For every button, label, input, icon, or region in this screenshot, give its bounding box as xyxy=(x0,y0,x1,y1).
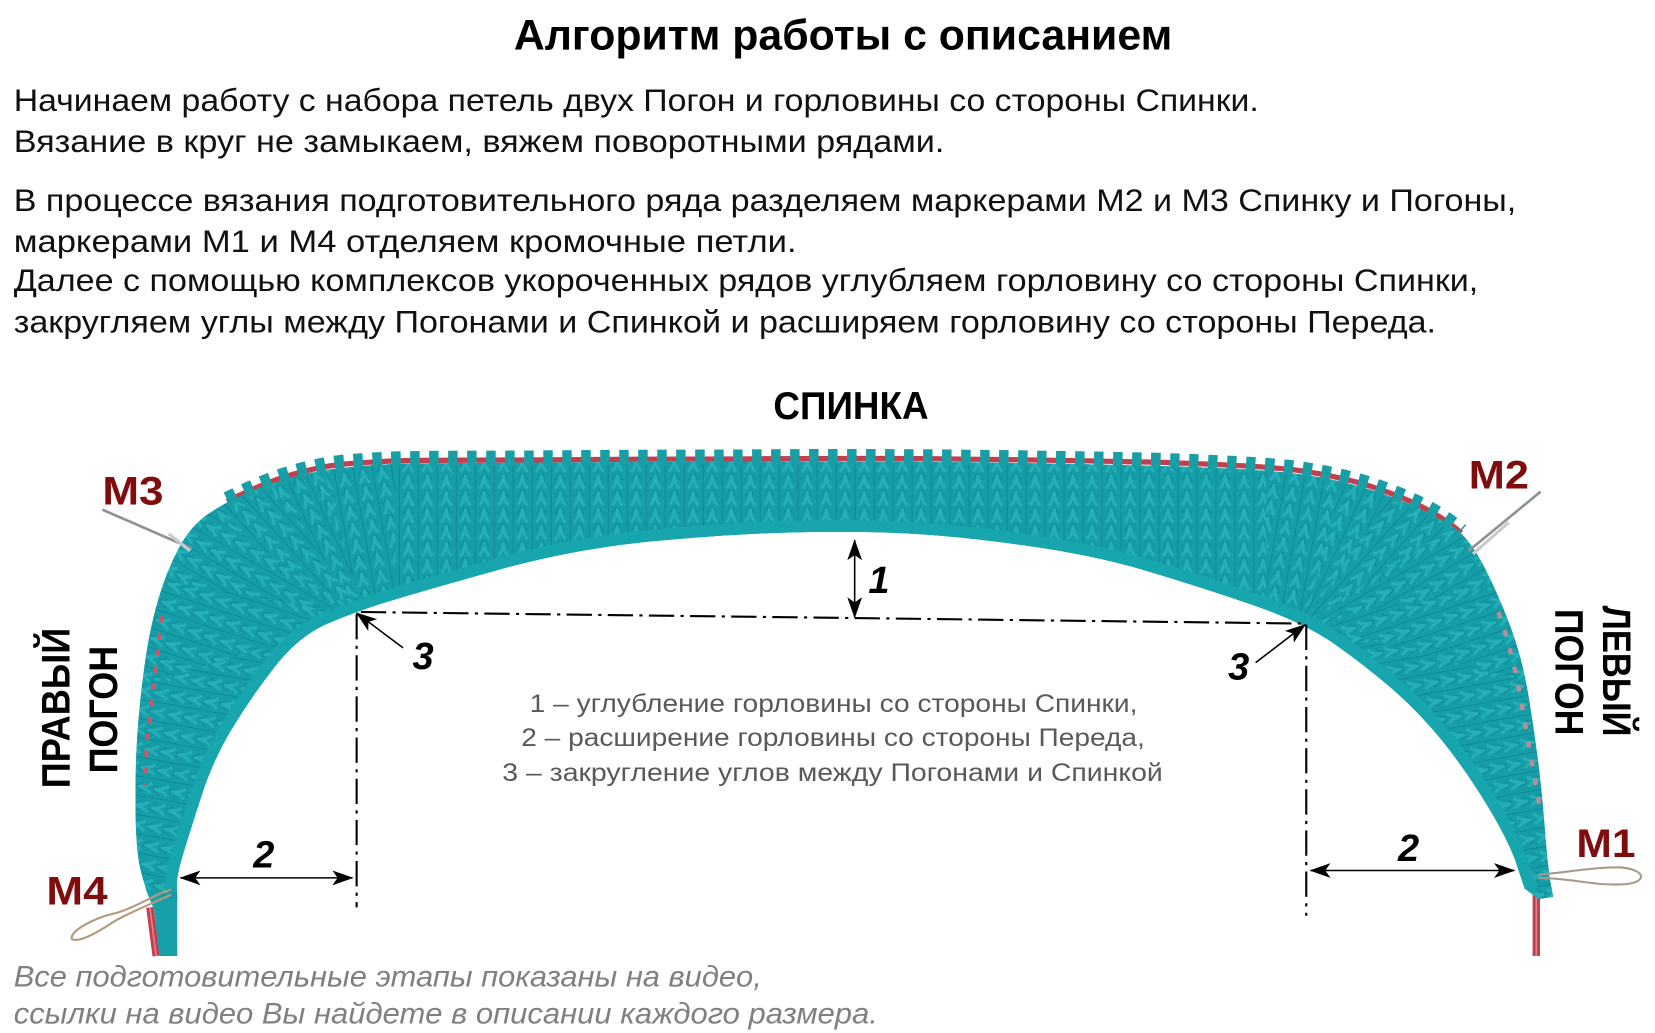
legend xyxy=(502,690,1163,787)
marker labels: М3 xyxy=(102,469,164,513)
edge holes on right shoulder of the wearer xyxy=(146,616,161,786)
footnote: Все подготовительные этапы показаны на видео, xyxy=(14,961,762,994)
text block: process description: маркерами М1 и М4 отделяем кромочные петли. xyxy=(14,223,797,259)
cable ends xyxy=(150,892,1536,956)
marker labels: М4 xyxy=(46,869,108,913)
arrow: right widening xyxy=(1310,870,1514,872)
text block: process description: закругляем углы между Погонами и Спинкой и расширяем горловину со стороны Переда. xyxy=(14,303,1436,339)
text block: process description: Далее с помощью комплексов укороченных рядов углубляем горловину со стороны Спинки, xyxy=(14,262,1478,298)
title: Алгоритм работы с описанием xyxy=(514,12,1172,59)
top edge stitch loops xyxy=(227,456,1461,531)
text block: process description xyxy=(14,182,1516,339)
legend: 2 – расширение горловины со стороны Переда, xyxy=(521,724,1145,752)
knit fabric xyxy=(135,462,1554,899)
knitted yoke illustration xyxy=(106,422,1583,960)
left shoulder label: ПОГОН xyxy=(1546,609,1590,735)
marker pin M3 xyxy=(102,510,192,551)
text block: intro: Начинаем работу с набора петель двух Погон и горловины со стороны Спинки. xyxy=(14,82,1259,118)
arrow: left corner xyxy=(357,613,403,648)
diagram numbers xyxy=(252,560,1419,876)
right shoulder label: ПРАВЫЙ xyxy=(33,628,79,788)
marker loop M4 xyxy=(72,889,171,940)
footnote: ссылки на видео Вы найдете в описании каждого размера. xyxy=(14,997,878,1030)
yarn tail xyxy=(147,892,177,956)
text block: intro: Вязание в круг не замыкаем, вяжем поворотными рядами. xyxy=(14,123,944,159)
neckline ribbon xyxy=(176,532,1532,894)
marker labels xyxy=(46,454,1635,913)
legend: 3 – закругление углов между Погонами и Спинкой xyxy=(502,759,1163,787)
left shoulder label: ЛЕВЫЙ xyxy=(1594,606,1640,736)
right shoulder label: ПОГОН xyxy=(82,646,126,773)
marker loop M1 xyxy=(1538,867,1641,885)
arrow: neckline depth xyxy=(854,540,856,617)
red cable along top xyxy=(227,458,1461,533)
edge holes on left shoulder of the wearer xyxy=(1498,612,1539,805)
heading: back section: СПИНКА xyxy=(773,385,929,428)
text block: intro xyxy=(14,82,1259,159)
footnote xyxy=(14,961,878,1030)
arrow: left widening xyxy=(180,877,352,879)
arrow: right corner xyxy=(1256,625,1305,663)
diagram numbers: 2 xyxy=(1397,828,1419,870)
diagram numbers: 1 xyxy=(868,560,890,602)
diagram numbers: 3 xyxy=(1228,647,1249,689)
marker labels: М1 xyxy=(1576,822,1635,866)
text block: process description: В процессе вязания подготовительного ряда разделяем маркерами М2 и М3 Спинку и Погоны, xyxy=(14,182,1516,218)
right shoulder label xyxy=(33,628,126,788)
dash-dot neckline guides xyxy=(357,612,1306,916)
diagram numbers: 2 xyxy=(252,834,274,876)
marker labels: М2 xyxy=(1469,454,1529,498)
legend: 1 – углубление горловины со стороны Спинки, xyxy=(530,690,1137,718)
diagram numbers: 3 xyxy=(413,636,434,678)
marker pin M2 xyxy=(1469,492,1541,554)
left shoulder label xyxy=(1546,606,1640,736)
